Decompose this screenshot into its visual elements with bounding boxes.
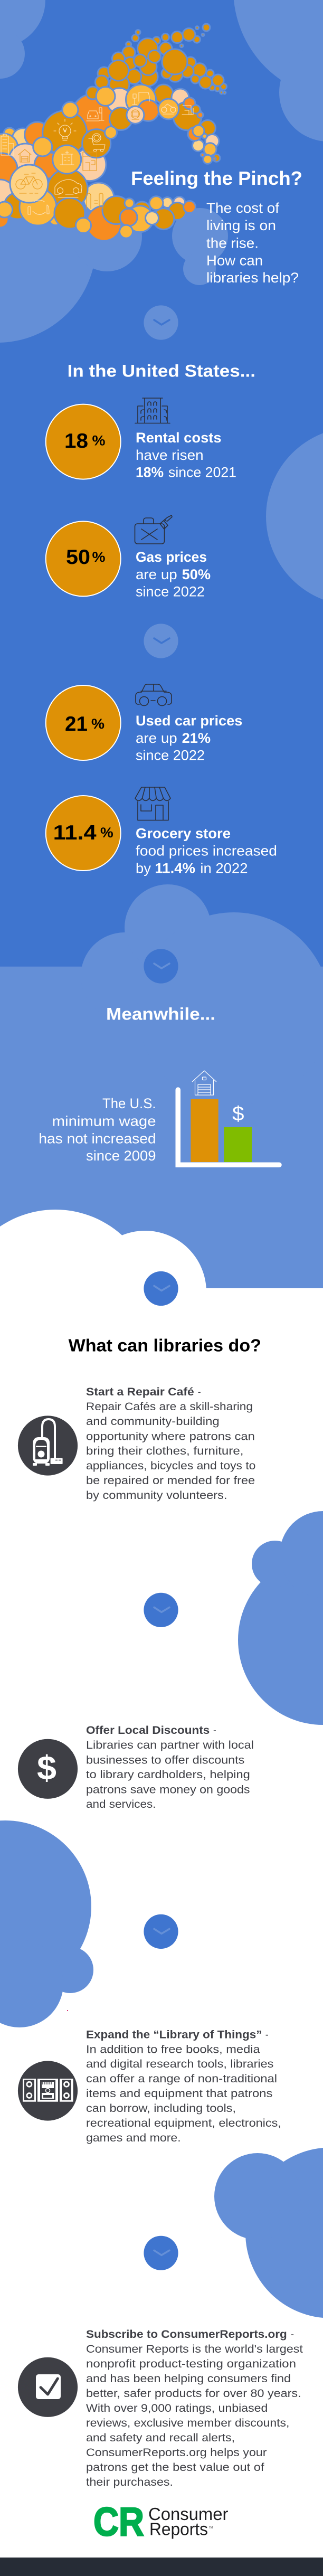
text: repair cafe: opportunity where patrons can (86, 1430, 255, 1442)
text: rental costs: 18% (136, 465, 164, 480)
text: library of things: items and equipment that patrons (86, 2087, 272, 2100)
intro text: The cost of (206, 200, 279, 216)
logo: Consumer Reports (93, 2499, 228, 2545)
text: local discounts: - (213, 1724, 216, 1737)
icon: balloons (87, 193, 103, 209)
background cloud: right side 1 (238, 1511, 323, 1725)
icon: light bulb (54, 119, 76, 140)
icon: check box (18, 2357, 78, 2417)
text: local discounts: and services. (86, 1798, 156, 1810)
icon: apartment building (135, 398, 170, 423)
label: dollar sign: $ (232, 1103, 244, 1125)
logo: Consumer Reports: CR (93, 2499, 144, 2545)
text: grocery store: Grocery store (136, 826, 231, 842)
text: local discounts: patrons save money on goods (86, 1783, 250, 1796)
icon: sedan (55, 180, 82, 197)
stat circle 18%: 18 (64, 430, 88, 452)
text: subscribe: reviews, exclusive member discounts, (86, 2417, 289, 2429)
icon: hospital (60, 151, 74, 165)
panel: grocery store (46, 787, 277, 876)
intro text: libraries help? (206, 270, 299, 286)
icon: coffee machine (182, 106, 193, 115)
icon: storefront (83, 152, 97, 171)
text: grocery store: in 2022 (200, 861, 248, 876)
icon: bicycle (16, 173, 42, 193)
text: repair cafe (86, 1385, 255, 1502)
heading: meanwhile: Meanwhile... (106, 1004, 215, 1023)
text: gas prices: 50% (182, 567, 211, 582)
arrow: chevron 2 (144, 624, 178, 658)
text: local discounts: Libraries can partner with local (86, 1739, 254, 1751)
stat circle 21%: % (91, 716, 104, 732)
text: local discounts: Offer Local Discounts (86, 1724, 210, 1737)
panel: local discounts (18, 1724, 254, 1810)
text: repair cafe: bring their clothes, furniture, (86, 1445, 243, 1457)
stat circle 50%: % (92, 549, 106, 565)
panel: rental costs (46, 398, 236, 480)
icon: car and parking sign (87, 108, 104, 121)
stat circle 11.4% (46, 796, 121, 871)
text: gas prices: since 2022 (136, 584, 205, 600)
text: repair cafe: - (198, 1385, 201, 1398)
text: subscribe: and safety and recall alerts, (86, 2431, 235, 2444)
text: subscribe: With over 9,000 ratings, unbiased (86, 2402, 268, 2414)
background clouds: top section (0, 0, 323, 606)
text: subscribe: Consumer Reports is the world's largest (86, 2343, 303, 2355)
icon: garage house (18, 149, 31, 162)
text: library of things: In addition to free books, media (86, 2043, 260, 2056)
arrow: chevron 7 (144, 2236, 178, 2270)
icon: dollar (18, 1739, 78, 1799)
icon: train (131, 110, 139, 119)
panel: repair cafe (18, 1385, 255, 1502)
logo: Consumer Reports: TM (209, 2526, 213, 2530)
panel: used car prices (46, 684, 242, 763)
text: gas prices: are up (136, 567, 177, 582)
text: library of things: recreational equipment, electronics, (86, 2117, 281, 2129)
bar chart: housing vs wages (175, 1071, 279, 1167)
text: used car prices: 21% (182, 730, 211, 746)
text: used car prices: are up (136, 730, 177, 746)
icon: shopping cart (89, 134, 105, 152)
logo: Consumer Reports: Reports (149, 2520, 208, 2539)
text: rental costs (136, 430, 236, 480)
icon: dollar: $ (37, 1749, 56, 1787)
text: minimum wage: The U.S. (102, 1096, 156, 1111)
arrow: chevron 4 (144, 1271, 178, 1306)
illustration: pinching hand made of bubbles (0, 24, 227, 241)
text: library of things: games and more. (86, 2131, 181, 2144)
intro text: How can (206, 252, 263, 268)
background cloud: right side 2 (214, 2147, 323, 2318)
text: local discounts (86, 1724, 254, 1810)
icon: bus stop (132, 92, 149, 105)
text: used car prices (136, 713, 242, 763)
text: subscribe: better, safer products for over 80 years. (86, 2387, 301, 2400)
text: rental costs: since 2021 (168, 465, 236, 480)
text: library of things: can offer a range of non-traditional (86, 2072, 277, 2085)
text: subscribe: Subscribe to ConsumerReports.org (86, 2328, 287, 2341)
stat circle 18%: % (92, 433, 106, 449)
text: subscribe: ConsumerReports.org helps your (86, 2446, 267, 2459)
stat circle 21%: 21 (65, 713, 88, 735)
stat circle 50%: 50 (66, 546, 90, 569)
icon: apartment buildings (1, 134, 14, 155)
text: repair cafe: Repair Cafés are a skill-sharing (86, 1400, 253, 1413)
text: repair cafe: Start a Repair Café (86, 1385, 194, 1398)
text: minimum wage: has not increased (39, 1131, 156, 1147)
text: subscribe (86, 2328, 303, 2488)
stat circle 11.4%: 11.4 (53, 822, 97, 844)
text: library of things: can borrow, including tools, (86, 2102, 236, 2115)
panel: gas prices (46, 515, 211, 600)
footer bar (0, 2558, 323, 2576)
text: library of things (86, 2028, 281, 2144)
text: grocery store: food prices increased (136, 843, 277, 858)
icon: vacuum cleaner (18, 1416, 78, 1476)
stat circle 18% (46, 404, 121, 479)
text: local discounts: businesses to offer discounts (86, 1753, 244, 1766)
panel: subscribe (18, 2328, 303, 2488)
stat circle 21% (46, 685, 121, 760)
text: repair cafe: by community volunteers. (86, 1489, 227, 1502)
heading: in the United States: In the United States... (68, 361, 255, 380)
text: library of things: Expand the “Library of Things” (86, 2028, 262, 2041)
icon: stereo (18, 2061, 78, 2121)
panel: light blue cloud section (0, 884, 323, 1294)
heading: what can libraries do: What can libraries do? (69, 1336, 261, 1355)
text: minimum wage (39, 1096, 156, 1164)
icon: utensils (28, 200, 49, 214)
stat circle 11.4%: % (100, 825, 113, 841)
title: Feeling the Pinch? (131, 167, 302, 189)
icon: storefront (135, 787, 170, 820)
background cloud: left side (0, 1820, 93, 2027)
icon: motorcycle (162, 104, 176, 114)
text: grocery store: 11.4% (155, 861, 195, 876)
intro text: living is on (206, 218, 276, 233)
icon: gas can (135, 515, 172, 544)
text: library of things: and digital research tools, libraries (86, 2058, 273, 2070)
logo: Consumer Reports: Consumer (148, 2504, 228, 2524)
text: minimum wage: minimum wage (52, 1113, 156, 1129)
intro text: the rise. (206, 235, 259, 251)
stat circle 50% (46, 521, 121, 596)
icon: car (136, 684, 172, 705)
text: subscribe: patrons get the best value out of (86, 2461, 264, 2474)
arrow: chevron 5 (144, 1593, 178, 1627)
text: repair cafe: be repaired or mended for free (86, 1474, 255, 1487)
text: rental costs: have risen (136, 447, 204, 463)
text: used car prices: since 2022 (136, 748, 205, 763)
intro text (206, 200, 299, 286)
text: subscribe: their purchases. (86, 2476, 173, 2488)
text: used car prices: Used car prices (136, 713, 242, 729)
text: grocery store: by (136, 861, 151, 876)
text: library of things: - (265, 2028, 269, 2041)
text: repair cafe: appliances, bicycles and toys to (86, 1459, 255, 1472)
text: subscribe: - (291, 2328, 294, 2341)
text: gas prices (136, 549, 211, 600)
text: grocery store (136, 826, 277, 876)
text: minimum wage: since 2009 (86, 1148, 156, 1164)
icon: house with garage (192, 1071, 216, 1095)
arrow: chevron 3 (144, 949, 178, 984)
panel: library of things (18, 2028, 281, 2144)
arrow: chevron 6 (144, 1914, 178, 1949)
text: subscribe: and has been helping consumers find (86, 2372, 291, 2385)
text: repair cafe: and community-building (86, 1415, 220, 1428)
text: subscribe: nonprofit product-testing organization (86, 2357, 296, 2370)
arrow: chevron 1 (144, 305, 178, 340)
text: gas prices: Gas prices (136, 549, 207, 565)
panel: white cloud section (0, 1210, 323, 2558)
text: rental costs: Rental costs (136, 430, 222, 446)
text: local discounts: to library cardholders, helping (86, 1768, 250, 1781)
